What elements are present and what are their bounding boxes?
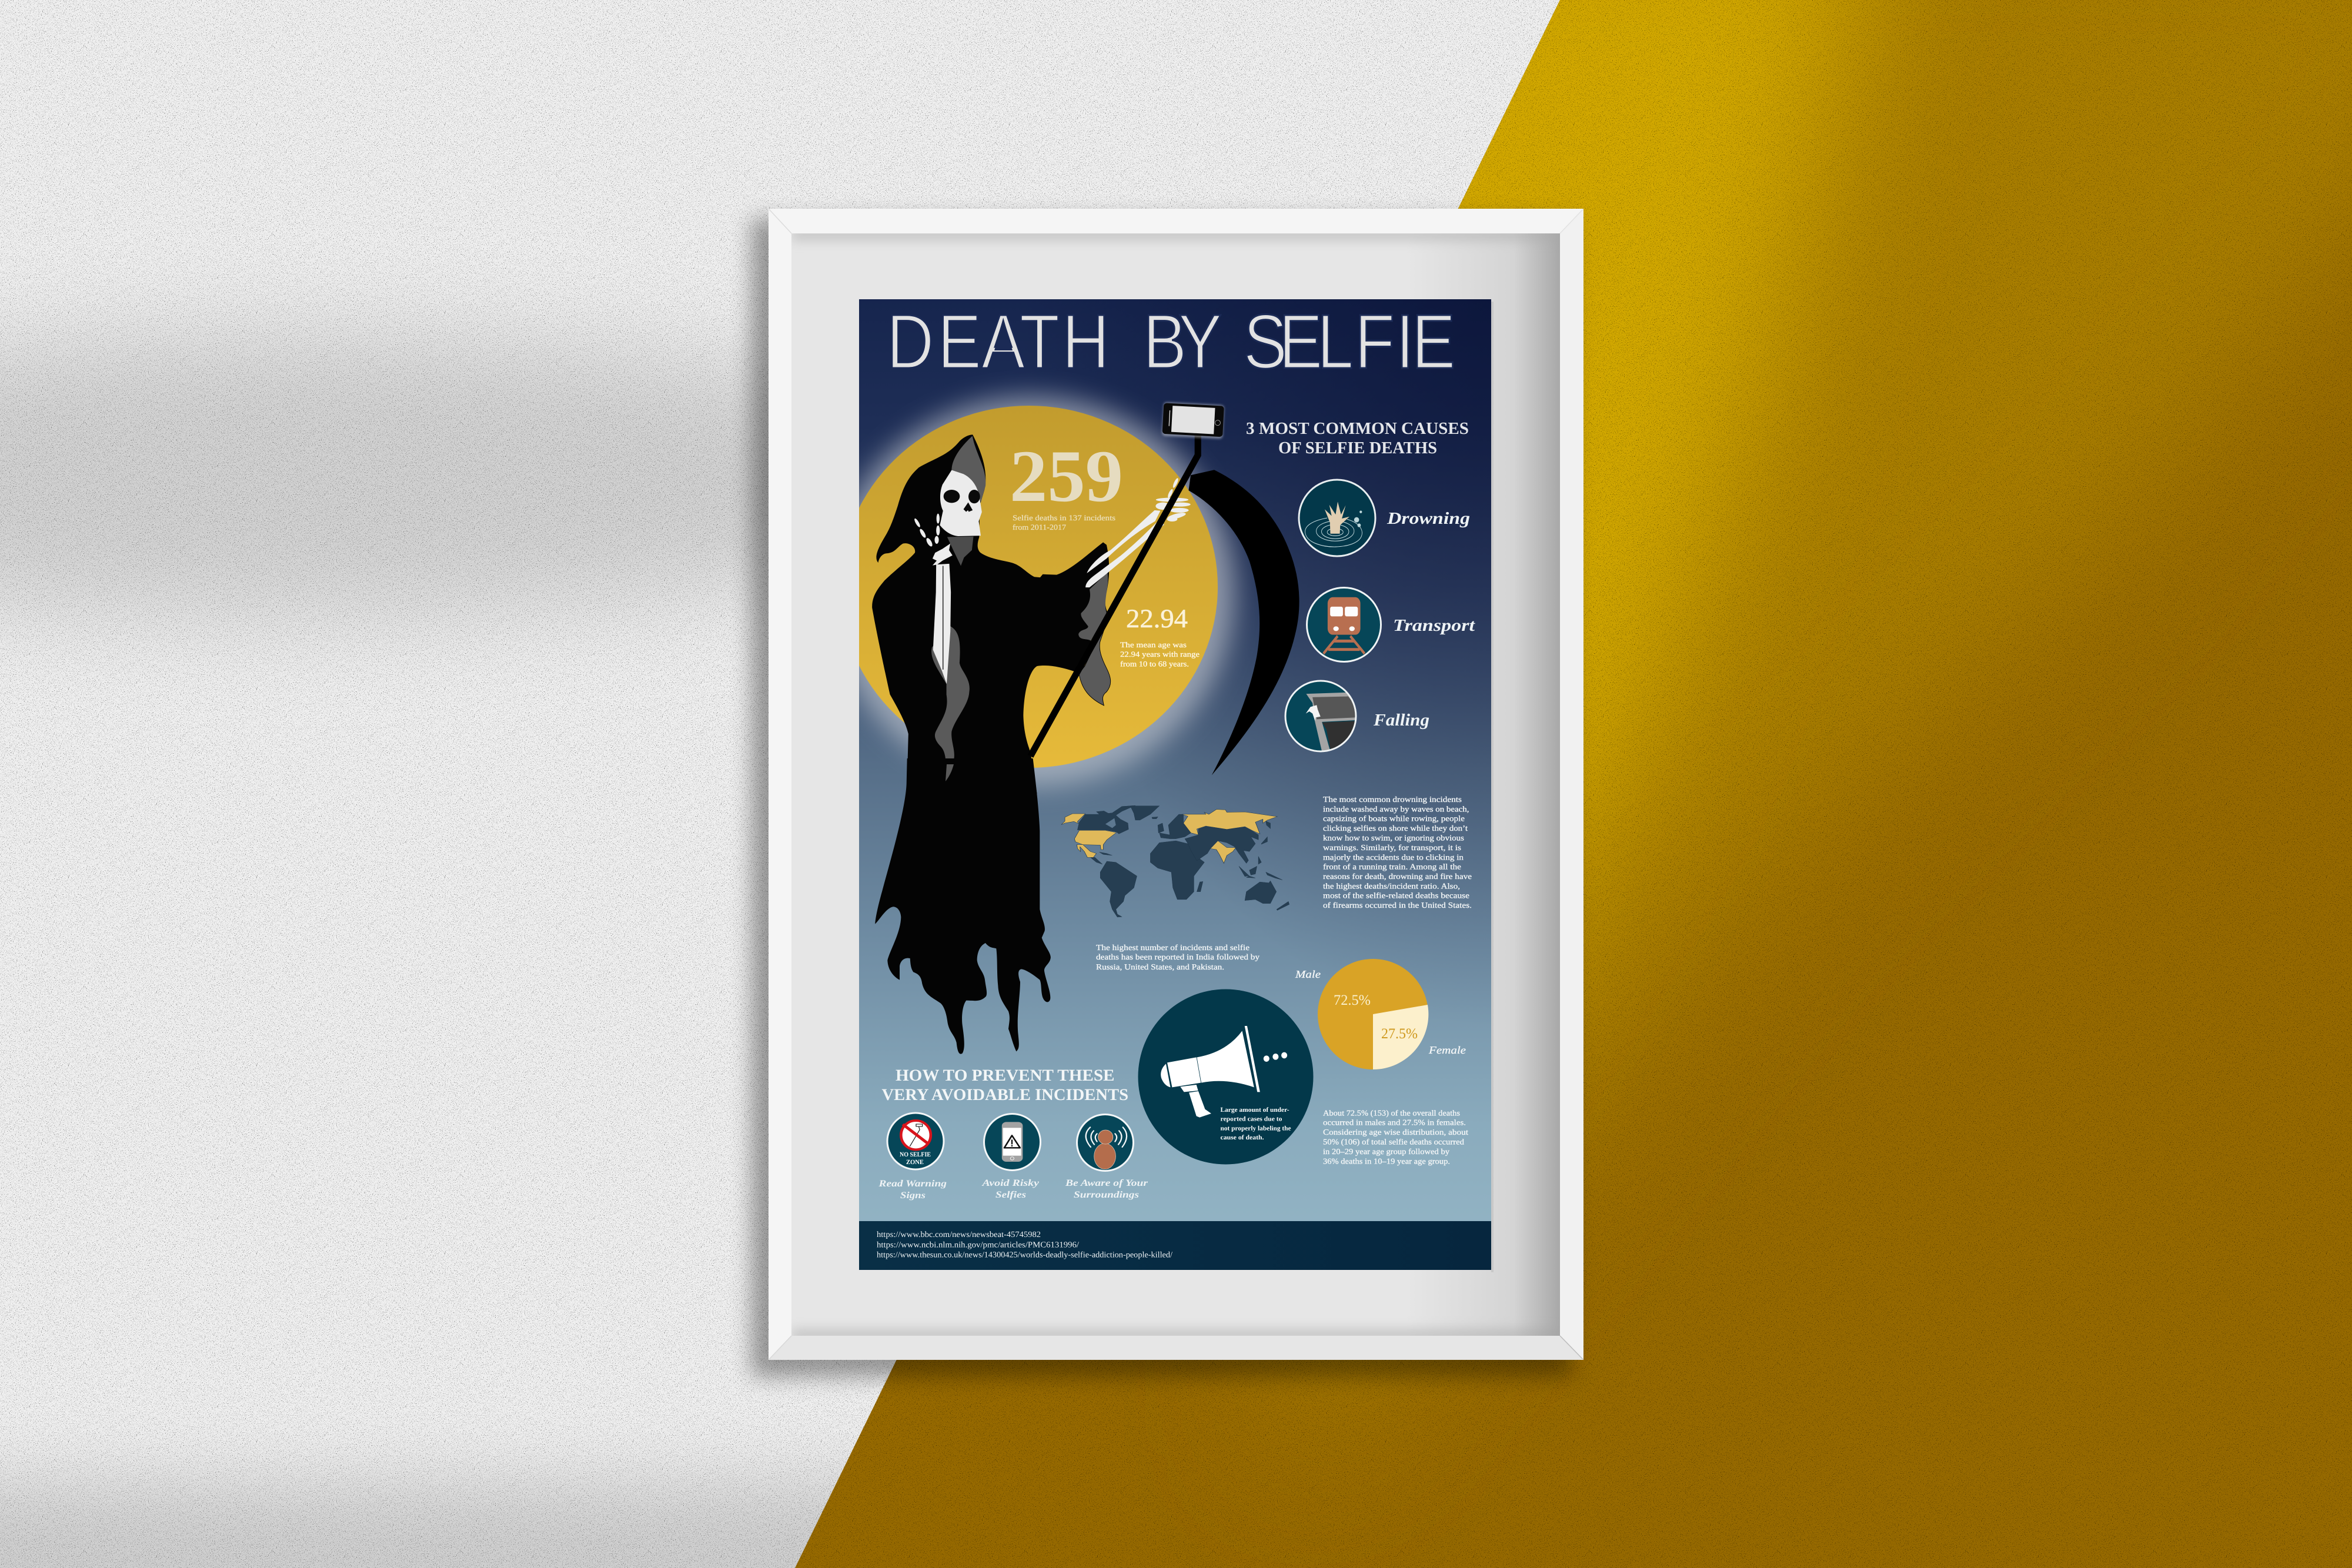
icon: no selfie zone: NO SELFIE bbox=[900, 1151, 931, 1158]
text block: causes explanation: capsizing of boats while rowing, people bbox=[1323, 814, 1465, 823]
hood interior bbox=[951, 436, 985, 502]
arm bones bbox=[1085, 477, 1191, 587]
label: be aware of surroundings: Be Aware of Your bbox=[1065, 1178, 1148, 1188]
label: be aware of surroundings: Surroundings bbox=[1074, 1190, 1139, 1200]
footer with sources: https://www.bbc.com/news/newsbeat-45745982 bbox=[877, 1231, 1041, 1239]
text block: map caption bbox=[1096, 943, 1259, 971]
stat: 259 deaths: Selfie deaths in 137 incidents bbox=[1013, 513, 1115, 522]
prevention heading: HOW TO PREVENT THESE bbox=[896, 1066, 1115, 1085]
cloak lower tatters bbox=[875, 758, 1051, 1054]
text block: gender and age bbox=[1323, 1108, 1468, 1165]
megaphone callout bbox=[1138, 989, 1314, 1164]
text block: causes explanation: the highest deaths/incident ratio. Also, bbox=[1323, 881, 1460, 890]
footer with sources: https://www.ncbi.nlm.nih.gov/pmc/articles/PMC6131996/ bbox=[877, 1241, 1079, 1249]
label: avoid risky selfies: Selfies bbox=[995, 1190, 1026, 1200]
causes heading bbox=[1246, 419, 1469, 457]
panel: three most common causes bbox=[1246, 419, 1475, 751]
text block: causes explanation: clicking selfies on shore while they don’t bbox=[1323, 824, 1468, 833]
label: read warning signs: Signs bbox=[900, 1191, 926, 1201]
cloak upper bbox=[872, 402, 1224, 794]
text block: causes explanation: majorly the accidents due to clicking in bbox=[1323, 852, 1464, 861]
text block: map caption: The highest number of incidents and selfie bbox=[1096, 943, 1250, 952]
selfie stick bbox=[1030, 433, 1198, 756]
frame drop shadow bbox=[751, 219, 1572, 1377]
stat: 259 deaths: 259 bbox=[1010, 436, 1123, 517]
causes heading: OF SELFIE DEATHS bbox=[1278, 439, 1437, 457]
moon glow bbox=[829, 396, 1235, 787]
panel: prevention bbox=[878, 1066, 1148, 1201]
callout text: cause of death. bbox=[1221, 1134, 1264, 1141]
text block: map caption: deaths has been reported in India followed by bbox=[1096, 952, 1259, 961]
footer with sources: https://www.thesun.co.uk/news/14300425/worlds-deadly-selfie-addiction-people-killed/ bbox=[877, 1251, 1172, 1260]
footer with sources bbox=[859, 1221, 1491, 1270]
text block: gender and age: 50% (106) of total selfie deaths occurred bbox=[1323, 1138, 1464, 1146]
callout text: reported cases due to bbox=[1221, 1116, 1282, 1123]
text block: gender and age: Considering age wise distribution, about bbox=[1323, 1128, 1468, 1136]
world map bbox=[1061, 805, 1289, 917]
poster bbox=[829, 298, 1491, 1270]
text block: gender and age: in 20–29 year age group followed by bbox=[1323, 1147, 1449, 1156]
pie chart: male vs female: 72.5% bbox=[1334, 992, 1371, 1008]
pie chart: male vs female: Male bbox=[1295, 968, 1321, 980]
pie chart: male vs female: Female bbox=[1428, 1044, 1466, 1056]
moon circle bbox=[840, 406, 1218, 768]
text block: causes explanation: most of the selfie-related deaths because bbox=[1323, 891, 1469, 900]
icon: megaphone bbox=[1161, 1026, 1287, 1118]
background: gold diagonal panel bbox=[795, 0, 2352, 1568]
neck bbox=[947, 537, 974, 566]
pie chart: male vs female bbox=[1295, 959, 1466, 1069]
icon: drowning hand bbox=[1299, 480, 1375, 556]
passe-partout mat bbox=[791, 229, 1560, 1340]
grey wisp tip bbox=[946, 764, 954, 781]
text block: causes explanation: warnings. Similarly, for transport, it is bbox=[1323, 843, 1461, 852]
stat: mean age 22.94: from 10 to 68 years. bbox=[1120, 660, 1189, 668]
callout text: Large amount of under- bbox=[1221, 1106, 1289, 1114]
phone glow bbox=[1162, 402, 1224, 439]
label: read warning signs bbox=[878, 1179, 947, 1201]
text block: causes explanation: reasons for death, drowning and fire have bbox=[1323, 872, 1472, 881]
grim reaper taking a selfie bbox=[872, 402, 1299, 1054]
callout text bbox=[1221, 1106, 1291, 1141]
label: drowning: Drowning bbox=[1387, 509, 1470, 528]
icon: aware person bbox=[1077, 1115, 1134, 1171]
label: be aware of surroundings bbox=[1065, 1178, 1148, 1200]
text block: causes explanation: include washed away by waves on beach, bbox=[1323, 804, 1469, 813]
text block: gender and age: About 72.5% (153) of the overall deaths bbox=[1323, 1108, 1460, 1117]
text block: causes explanation: The most common drowning incidents bbox=[1323, 795, 1462, 804]
causes heading: 3 MOST COMMON CAUSES bbox=[1246, 419, 1469, 438]
collar bones bbox=[913, 514, 953, 684]
label: avoid risky selfies: Avoid Risky bbox=[981, 1178, 1040, 1188]
text block: causes explanation: of firearms occurred in the United States. bbox=[1323, 901, 1472, 910]
phone bbox=[1162, 403, 1224, 437]
stat: mean age 22.94 bbox=[1120, 604, 1200, 668]
title: DEATH BY SELFIE bbox=[887, 298, 1455, 385]
icon: falling from cliff bbox=[1285, 681, 1359, 751]
stat: mean age 22.94: 22.94 years with range bbox=[1120, 650, 1200, 658]
text block: causes explanation: know how to swim, or ignoring obvious bbox=[1323, 833, 1464, 842]
label: read warning signs: Read Warning bbox=[878, 1179, 947, 1189]
label: falling: Falling bbox=[1373, 711, 1429, 730]
text block: gender and age: occurred in males and 27.5% in females. bbox=[1323, 1118, 1466, 1127]
icon: no selfie zone bbox=[887, 1113, 944, 1169]
prevention heading: VERY AVOIDABLE INCIDENTS bbox=[882, 1086, 1128, 1104]
pie chart: male vs female: 27.5% bbox=[1381, 1026, 1418, 1042]
skull bbox=[940, 470, 982, 536]
label: avoid risky selfies bbox=[981, 1178, 1040, 1200]
scythe blade bbox=[1188, 470, 1299, 775]
icon: phone warning bbox=[984, 1114, 1041, 1170]
prevention heading bbox=[882, 1066, 1128, 1104]
stat: mean age 22.94: 22.94 bbox=[1126, 604, 1188, 633]
label: transport: Transport bbox=[1393, 616, 1475, 635]
callout text: not properly labeling the bbox=[1221, 1125, 1291, 1132]
icon: train on tracks bbox=[1307, 588, 1381, 662]
grey drape wisp bbox=[931, 626, 970, 781]
stat: 259 deaths: from 2011-2017 bbox=[1013, 523, 1067, 531]
picture frame bbox=[769, 209, 1583, 1360]
text block: causes explanation bbox=[1323, 795, 1472, 910]
sleeve shadow grey bbox=[1078, 573, 1108, 641]
text block: gender and age: 36% deaths in 10–19 year age group. bbox=[1323, 1156, 1450, 1165]
text block: causes explanation: front of a running train. Among all the bbox=[1323, 862, 1461, 871]
text block: map caption: Russia, United States, and Pakistan. bbox=[1096, 962, 1224, 971]
stat: mean age 22.94: The mean age was bbox=[1120, 640, 1187, 649]
icon: no selfie zone: ZONE bbox=[906, 1159, 924, 1166]
skull eyes and nose bbox=[944, 490, 980, 512]
